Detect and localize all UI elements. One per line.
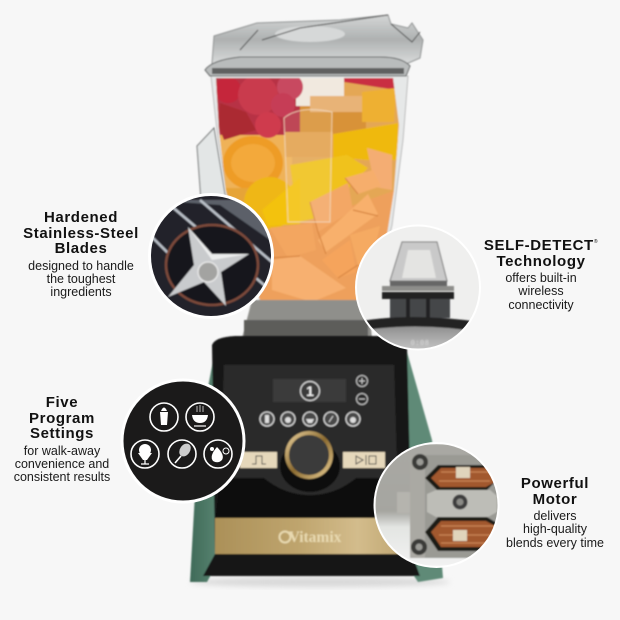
caption: program settings: consistent results [14, 470, 110, 484]
caption: motor: Motor [533, 491, 577, 508]
caption: blades: ingredients [50, 285, 112, 299]
program number: 1 [306, 383, 314, 399]
berries [216, 78, 240, 103]
circle: self-detect container: 0:08 [411, 340, 429, 348]
caption: blades: Stainless-Steel [23, 225, 139, 242]
caption: motor: blends every time [506, 536, 604, 550]
caption: program settings: Settings [30, 425, 94, 442]
brand name: Vitamix [289, 529, 342, 546]
green side shells [190, 345, 225, 582]
caption: blades: Blades [55, 240, 107, 257]
jar inner tube [284, 110, 332, 222]
caption: program settings: for walk-away [24, 444, 100, 458]
floor shadow [190, 577, 450, 587]
caption: blades [23, 209, 139, 299]
yellow slices [333, 123, 398, 160]
icon: whisk [168, 440, 196, 468]
start stop button [343, 452, 385, 468]
icon: frozen dessert [131, 440, 159, 468]
jar base collar [242, 300, 372, 338]
circle: motor [374, 442, 500, 568]
circle: stainless-steel blades [148, 193, 274, 319]
orange slice [223, 136, 283, 190]
caption: self-detect: SELF-DETECT® [484, 237, 598, 254]
caption: self-detect: connectivity [508, 298, 574, 312]
caption: program settings [14, 394, 110, 484]
caption: self-detect [484, 237, 598, 312]
program buttons [260, 412, 360, 426]
caption: self-detect: wireless [518, 284, 564, 298]
caption: motor: Powerful [521, 475, 589, 492]
plus and minus buttons [356, 376, 368, 404]
jar body [211, 76, 408, 305]
circle: self-detect container [355, 224, 481, 352]
icon: cleaning bubbles [204, 440, 232, 468]
gold band [215, 518, 405, 554]
caption: self-detect: offers built-in [505, 271, 577, 285]
blender illustration [124, 14, 498, 589]
caption: motor [506, 475, 604, 550]
control panel [220, 365, 398, 505]
caption: motor: delivers [533, 509, 577, 523]
jar rim [205, 57, 410, 76]
caption: blades: the toughest [47, 272, 115, 286]
black housing [203, 336, 420, 576]
jar handle [197, 128, 226, 200]
caption: program settings: convenience and [15, 457, 109, 471]
icon: hot soup [186, 403, 214, 431]
brand logo [280, 532, 290, 542]
caption: self-detect: Technology [496, 253, 586, 270]
pulse button [240, 452, 277, 468]
caption: program settings: Five [46, 394, 78, 411]
caption: blades: Hardened [44, 209, 118, 226]
jar lid [212, 15, 423, 64]
caption: blades: designed to handle [28, 259, 134, 273]
jar with fruit [205, 15, 423, 338]
circle: program settings [122, 380, 244, 502]
display [273, 379, 346, 402]
melon pieces [260, 192, 392, 300]
program number [300, 382, 320, 400]
icon: smoothie [150, 403, 178, 431]
blender base [190, 336, 443, 582]
dial [280, 440, 340, 492]
caption: program settings: Program [29, 410, 95, 427]
caption: motor: high-quality [523, 522, 587, 536]
fruit layers [215, 77, 400, 301]
